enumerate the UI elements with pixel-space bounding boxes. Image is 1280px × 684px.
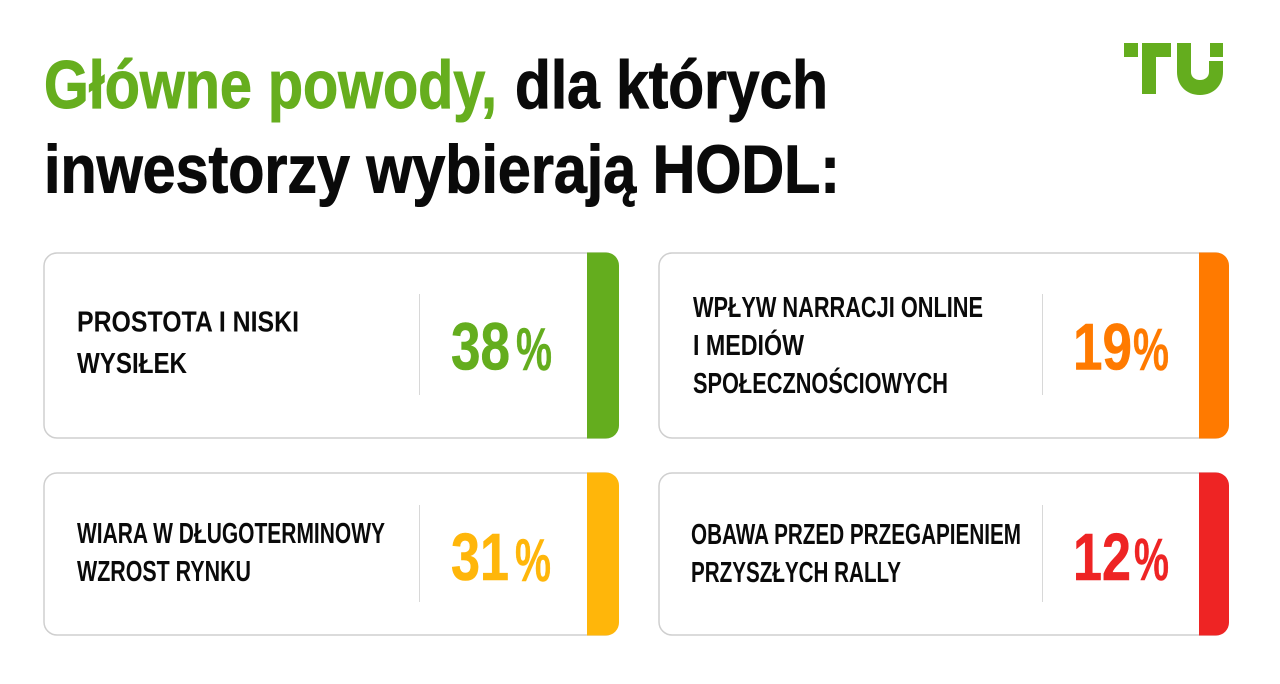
value: 38%: 38 (451, 310, 510, 384)
label: obawa: OBAWA PRZED PRZEGAPIENIEM (691, 519, 1021, 551)
label: wpływ narracji (693, 292, 983, 400)
value: 19%: 19 (1073, 310, 1132, 384)
value: 31%: % (515, 527, 551, 594)
title: inwestorzy wybierają HODL: (44, 132, 840, 208)
panel: wpływ narracji 19% (659, 252, 1229, 438)
value: 12%: 12 (1073, 520, 1131, 595)
label: obawa (691, 519, 1021, 589)
panel: obawa 12% (659, 472, 1229, 636)
label: wiara: WZROST RYNKU (77, 556, 251, 588)
label: wpływ narracji: WPŁYW NARRACJI ONLINE (693, 292, 983, 324)
label: wiara: WIARA W DŁUGOTERMINOWY (77, 518, 385, 550)
value: 31%: 31 (451, 520, 509, 595)
panel: wiara 31% (44, 472, 619, 636)
panel: prostota 38% (44, 252, 619, 438)
label: prostota: PROSTOTA I NISKI (77, 306, 299, 338)
label: wpływ narracji: I MEDIÓW (693, 328, 805, 362)
label: wiara (77, 518, 385, 588)
value: 38%: % (516, 316, 552, 383)
title (44, 47, 840, 208)
title: dla których (515, 47, 828, 123)
value: 12%: % (1134, 527, 1169, 593)
label: obawa: PRZYSZŁYCH RALLY (691, 557, 901, 589)
label: prostota: WYSIŁEK (77, 348, 187, 380)
value: 19%: % (1133, 317, 1169, 383)
title: Główne powody, (44, 47, 497, 123)
label: prostota (77, 306, 299, 380)
logo: TU (1124, 43, 1223, 95)
label: wpływ narracji: SPOŁECZNOŚCIOWYCH (693, 366, 948, 400)
